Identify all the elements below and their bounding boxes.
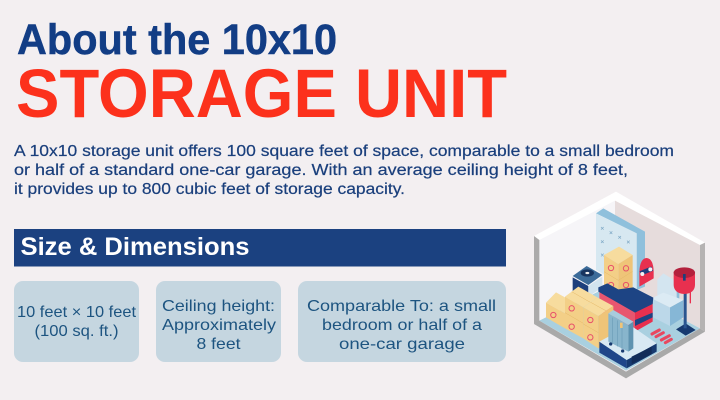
- right wall edge: [700, 243, 705, 332]
- floor rim: [534, 321, 705, 378]
- intro paragraph: it provides up to 800 cubic feet of storage capacity.: [14, 181, 405, 198]
- suitcase: [608, 310, 633, 353]
- tall cardboard box: [604, 247, 633, 297]
- card: ceiling height: 8 feet: [196, 336, 241, 353]
- intro paragraph: [14, 143, 674, 198]
- left wall edge: [534, 236, 539, 324]
- card: ceiling height: Ceiling height:: [162, 298, 275, 315]
- low navy crate: [599, 325, 657, 368]
- dumbbells: [652, 330, 671, 343]
- card: comparable to: one-car garage: [339, 336, 465, 353]
- back left wall: [539, 198, 615, 322]
- turntable: [573, 266, 602, 300]
- section header: Size & Dimensions: [14, 229, 506, 266]
- cardboard box stack: [546, 287, 613, 348]
- title line: About the 10x10: About the 10x10: [17, 16, 337, 64]
- mattress: [596, 208, 645, 293]
- title line: STORAGE UNIT: STORAGE UNIT: [16, 55, 507, 132]
- surfboard: [639, 258, 654, 287]
- section header: Size & Dimensions: Size & Dimensions: [20, 233, 249, 261]
- card: comparable to: Comparable To: a small: [307, 298, 496, 315]
- floor: [539, 283, 700, 371]
- title: [16, 16, 507, 132]
- card: floor size: [14, 281, 139, 362]
- back right wall: [615, 198, 700, 328]
- card: ceiling height: [156, 281, 281, 362]
- card: ceiling height: Approximately: [162, 317, 276, 334]
- intro paragraph: A 10x10 storage unit offers 100 square feet of space, comparable to a small bedroom: [14, 143, 674, 160]
- card: comparable to: bedroom or half of a: [322, 317, 482, 334]
- shelf unit: [598, 283, 653, 332]
- wall top rim: [534, 192, 705, 245]
- intro paragraph: or half of a standard one-car garage. With an average ceiling height of 8 feet,: [14, 162, 628, 179]
- floor lamp: [674, 267, 696, 336]
- card: comparable to: [298, 281, 506, 362]
- card: floor size: (100 sq. ft.): [34, 323, 118, 340]
- armchair: [652, 273, 683, 326]
- card: floor size: 10 feet × 10 feet: [17, 304, 137, 321]
- illustration: isometric storage room: [534, 192, 705, 378]
